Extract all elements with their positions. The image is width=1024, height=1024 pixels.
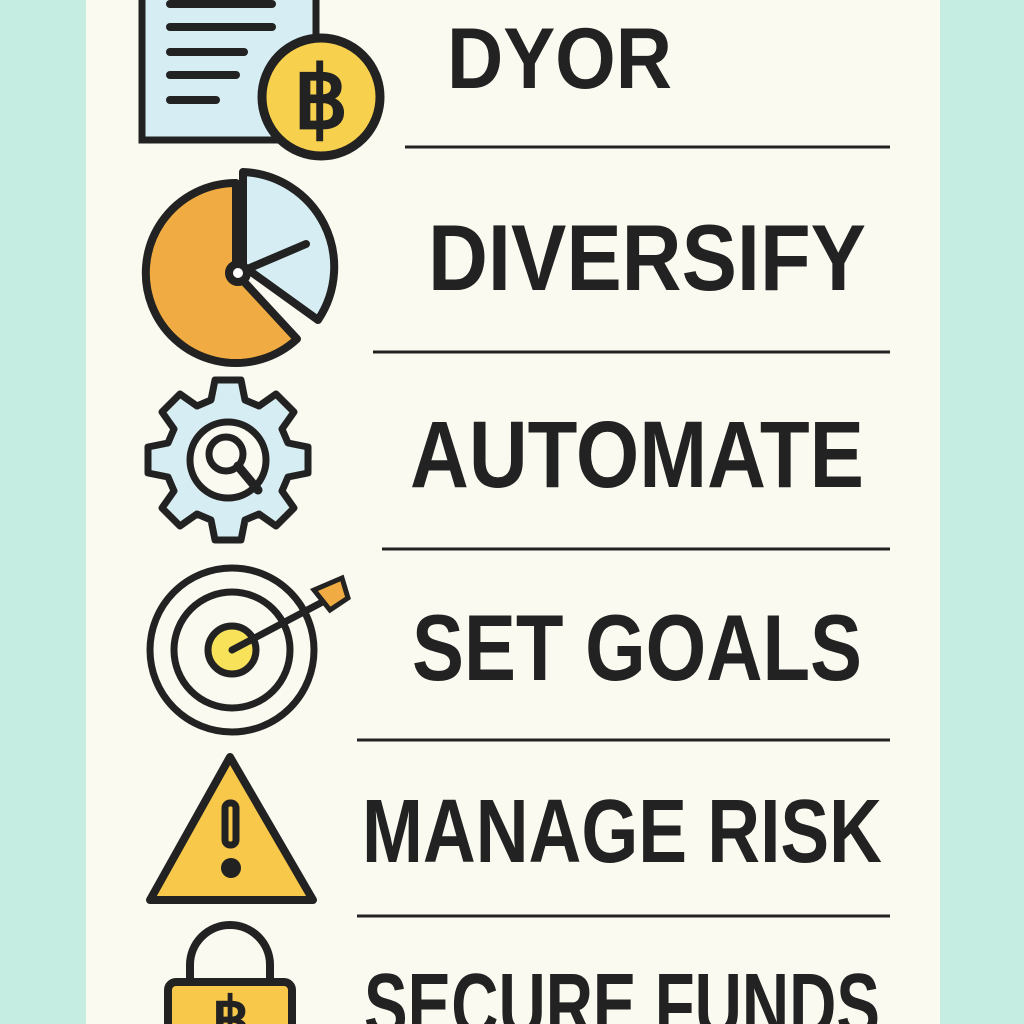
- heading: DIVERSIFY: DIVERSIFY: [428, 205, 866, 310]
- icon: document with bitcoin: [142, 0, 380, 156]
- heading: DYOR: DYOR: [447, 11, 672, 107]
- icon: document with bitcoin: ฿: [294, 51, 348, 147]
- icon: target with arrow: [150, 568, 348, 732]
- heading: MANAGE RISK: MANAGE RISK: [362, 782, 882, 882]
- heading: AUTOMATE: AUTOMATE: [410, 402, 864, 508]
- icon: gear with magnifier: [148, 380, 308, 540]
- icon: pie chart: [146, 172, 334, 363]
- icon: padlock with bitcoin: [168, 925, 292, 1024]
- icon: warning triangle: [150, 757, 313, 900]
- heading: SET GOALS: SET GOALS: [412, 595, 862, 700]
